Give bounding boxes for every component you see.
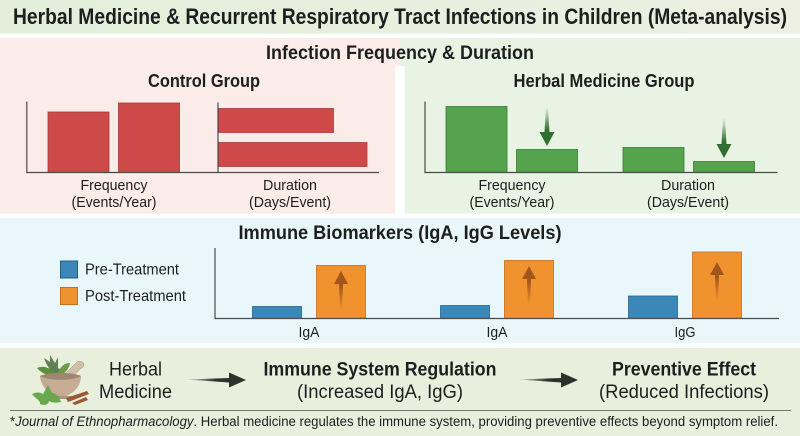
herbal group heading: Herbal Medicine Group [514,71,694,91]
bar chart: immune markers [215,248,779,341]
immune regulation text [264,360,496,403]
heading: Immune Biomarkers (IgA, IgG Levels) [238,223,562,244]
axis labels: IgG [674,324,696,341]
panel: mechanism flow [0,348,800,436]
herbal group charts [425,102,778,211]
immune regulation text: (Increased IgA, IgG) [297,381,463,403]
duration label: (Days/Event) [249,194,331,211]
frequency label: (Events/Year) [470,194,554,211]
axes [215,248,779,318]
frequency bars [446,106,578,172]
axis labels: IgA [486,324,508,341]
preventive effect text: (Reduced Infections) [599,381,769,403]
panel: infection frequency and duration [0,38,800,214]
arrow [186,372,246,388]
footnote: *Journal of Ethnopharmacology. Herbal medicine regulates the immune system, providing preventive effects beyond symptom relief. [10,414,778,429]
control group charts [27,102,379,211]
frequency label: Frequency [80,177,148,194]
legend [60,261,187,305]
frequency label: (Events/Year) [72,194,156,211]
herbal medicine group background [400,38,800,214]
control group heading: Control Group [148,71,260,91]
legend: Pre-Treatment [85,262,180,278]
axes [27,102,379,172]
preventive effect text [599,360,769,403]
icon: down arrow duration [716,118,732,158]
pre-treatment bars [252,296,678,318]
panel: immune biomarkers [0,218,800,343]
immune regulation text: Immune System Regulation [264,360,496,380]
icon: down arrow frequency [540,107,554,146]
duration label: (Days/Event) [647,194,729,211]
herbal medicine text: Herbal [109,360,162,380]
herbal medicine text: Medicine [99,382,172,403]
duration bars [623,148,754,172]
duration bars [218,108,367,166]
axis labels [298,324,696,341]
legend: Post-Treatment [85,288,187,305]
duration label: Duration [661,177,715,194]
post-treatment bars [316,252,742,318]
control group background [0,38,400,214]
frequency bars [48,103,180,172]
axes [425,102,778,172]
icon: mortar with herbs [32,355,89,405]
preventive effect text: Preventive Effect [612,360,757,380]
duration label: Duration [263,177,317,194]
icon: up arrows [334,262,724,310]
arrow [518,372,578,388]
axis labels: IgA [298,324,320,341]
frequency label: Frequency [478,177,546,194]
section heading: Infection Frequency & Duration [266,43,534,64]
